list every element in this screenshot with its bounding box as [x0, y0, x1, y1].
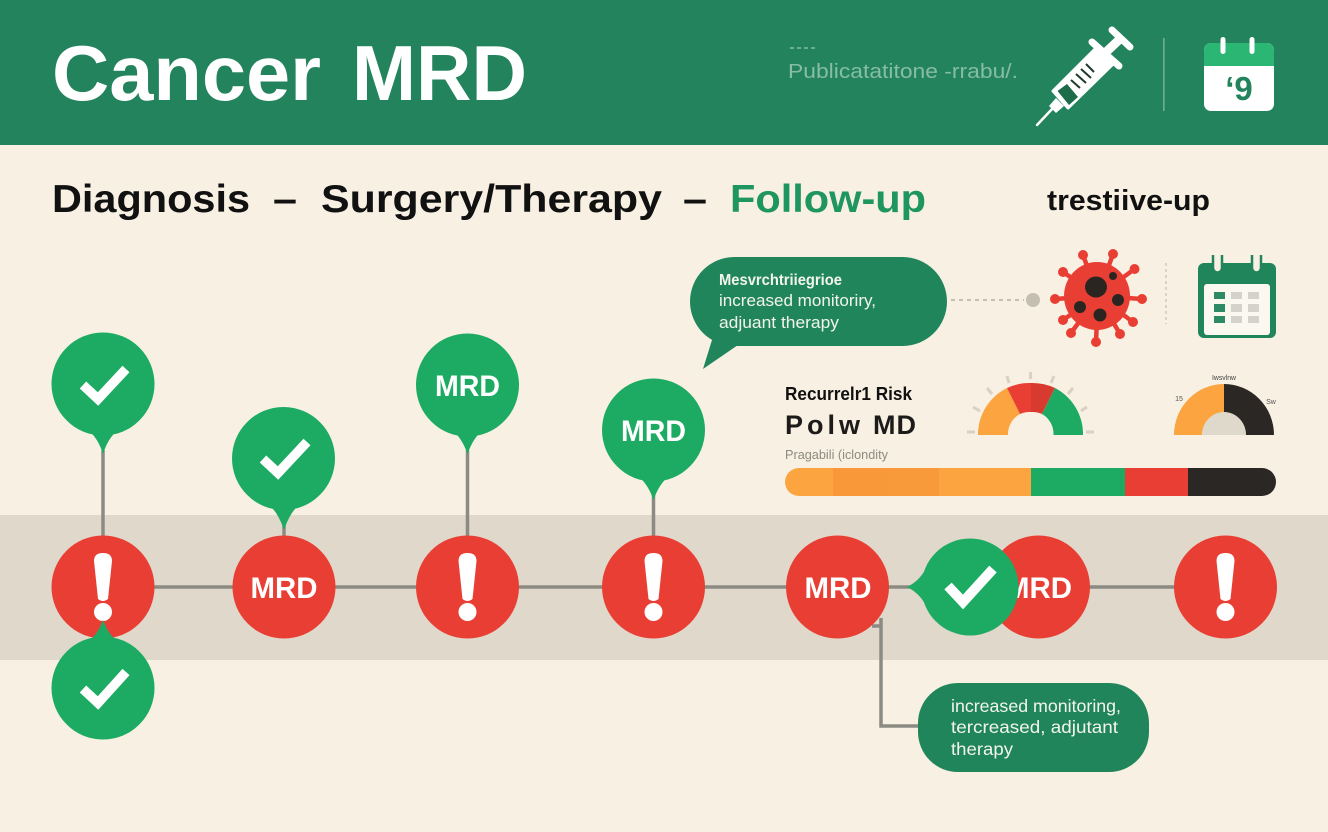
- icon: syringe: [1037, 30, 1130, 125]
- connector lines: [103, 450, 1226, 726]
- milestone: red alert 7: [1174, 536, 1277, 638]
- icon: calendar grid: [1198, 255, 1276, 338]
- title: MRD: [352, 29, 527, 117]
- callout: lower pill: tercreased, adjutant: [951, 717, 1118, 737]
- milestone: red alert 4: [602, 536, 705, 638]
- milestone: red MRD 5: [786, 536, 889, 638]
- dotted divider: [1165, 263, 1167, 324]
- gauge: second dial: [1174, 375, 1277, 435]
- gauge: recurrence risk: [967, 372, 1094, 435]
- gauge: second dial: 15: [1175, 396, 1183, 403]
- timeline stage heading: –: [683, 178, 707, 221]
- gauge: second dial: Sw: [1266, 399, 1277, 406]
- risk panel: [785, 384, 1276, 496]
- gauge: second dial: Iwsvlnw: [1212, 375, 1237, 382]
- marker: green check top left: [52, 332, 154, 454]
- timeline stage heading: Surgery/Therapy: [321, 178, 662, 221]
- callout: upper speech bubble: increased monitoriry,: [719, 291, 876, 310]
- timeline stage heading: [52, 178, 926, 221]
- risk value: Polw: [785, 410, 861, 440]
- marker: green MRD fourth: MRD: [621, 415, 686, 448]
- icon: calendar badge: ‘9: [1225, 70, 1253, 107]
- marker: green check second: [232, 407, 335, 530]
- milestone: red alert 3: [416, 536, 519, 638]
- header banner: [0, 0, 1328, 145]
- timeline stage heading: Diagnosis: [52, 178, 250, 221]
- callout: upper speech bubble: adjuant therapy: [719, 313, 840, 332]
- icon: virus: [1050, 249, 1147, 347]
- title: Cancer: [52, 29, 321, 117]
- milestone: red MRD 2: [232, 536, 336, 638]
- dotted connector: [951, 293, 1040, 307]
- milestone: red MRD 6: [987, 536, 1090, 638]
- risk sublabel: Pragabili (iclondity: [785, 448, 889, 462]
- secondary heading: trestiive-up: [1047, 185, 1210, 217]
- milestone: red MRD 5: MRD: [804, 572, 872, 605]
- marker: green MRD fourth: [602, 378, 705, 500]
- callout: lower pill: [918, 683, 1149, 772]
- publication label: Publicatatitone -rrabu/.: [788, 61, 1018, 83]
- milestone: red MRD 2: MRD: [250, 572, 318, 605]
- milestone: red alert 1: [52, 536, 154, 638]
- callout: lower pill: therapy: [951, 739, 1013, 759]
- title: [52, 29, 527, 117]
- timeline stage heading: Follow-up: [730, 178, 926, 221]
- icon: calendar badge: [1204, 37, 1274, 111]
- risk title: Recurrelr1 Risk: [785, 384, 913, 404]
- marker: green check overlap: [907, 538, 1018, 636]
- callout: upper speech bubble: Mesvrchtriiegrioe: [719, 272, 842, 289]
- risk value: [785, 410, 916, 440]
- marker: green check bottom left: [52, 620, 154, 740]
- marker: green MRD third: MRD: [435, 370, 500, 403]
- callout: upper speech bubble: [690, 257, 947, 369]
- divider: [1163, 38, 1165, 111]
- callout: lower pill: increased monitoring,: [951, 696, 1121, 716]
- milestone: red MRD 6: MRD: [1005, 572, 1072, 605]
- stacked probability bar: [785, 468, 1276, 496]
- risk value: MD: [873, 410, 916, 440]
- timeline stage heading: –: [273, 178, 297, 221]
- marker: green MRD third: [416, 334, 519, 454]
- timeline band: [0, 515, 1328, 660]
